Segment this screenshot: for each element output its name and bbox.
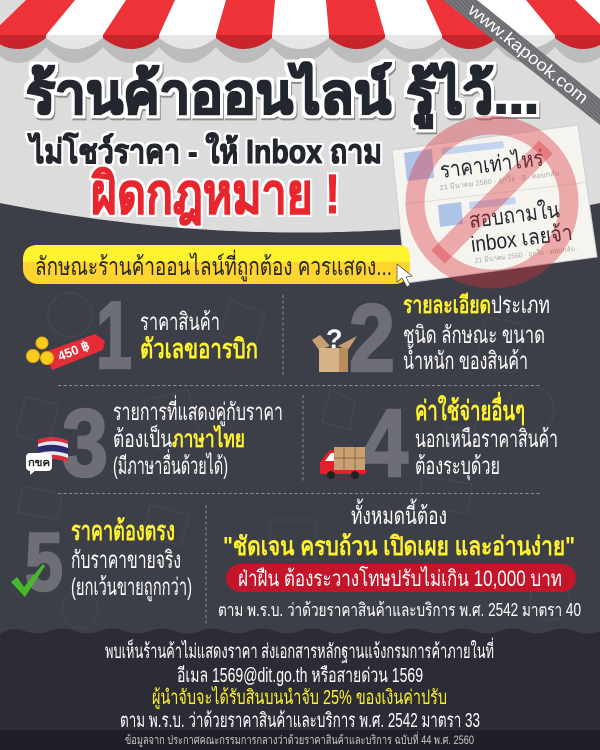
text [113, 395, 283, 480]
illustration: crossed-out inbox comments [392, 125, 597, 283]
item 1: price in Arabic numerals [26, 282, 258, 389]
yellow banner [23, 245, 412, 287]
icon: coins and price tag [26, 334, 105, 370]
footer panel [0, 628, 600, 750]
text: กับราคาขายจริง [71, 547, 181, 574]
awning [0, 0, 600, 63]
paper text: how much: ราคาเท่าไหร่ [439, 145, 545, 183]
icon: cursor [397, 264, 412, 287]
icon: box with question mark: ? [326, 324, 342, 354]
ribbon: website [443, 0, 600, 125]
icon: Thai flag and speech bubble: กขค [28, 458, 50, 469]
icon: delivery truck [320, 447, 366, 479]
text: รายการที่แสดงคู่กับราคา [113, 395, 283, 427]
text: ตัวเลขอารบิก [140, 334, 258, 364]
text [71, 516, 192, 602]
text: ค่าใช้จ่ายอื่นๆ [415, 391, 525, 426]
illustration: crossed-out inbox comments: 21 มีนาคม 2560 · ถูกใจ · 3 · ตอบกลับ · [439, 168, 564, 192]
prohibition sign [415, 125, 569, 279]
item 2: product details [312, 285, 550, 392]
text [403, 292, 550, 375]
source bar: ข้อมูลจาก ประกาศคณะกรรมการกลางว่าด้วยราคาสินค้าและบริการ ฉบับที่ 44 พ.ศ. 2560 [125, 731, 474, 748]
text: (ยกเว้นขายถูกกว่า) [71, 574, 192, 602]
contact: อีเมล 1569@dit.go.th หรือสายด่วน 1569 [177, 665, 423, 687]
title line 3: ผิดกฎหมาย ! [91, 162, 340, 225]
icon: box with question mark [312, 324, 357, 372]
yellow banner: ลักษณะร้านค้าออนไลน์ที่ถูกต้อง ควรแสดง... [35, 249, 392, 282]
text: ราคาสินค้า [140, 309, 220, 336]
paper card [392, 125, 597, 283]
illustration: crossed-out inbox comments: 21 มีนาคม 2560 · ถูกใจ · ตอบกลับ · [474, 243, 579, 265]
item 5: price matches selling price [11, 515, 192, 608]
numeral 2: 2 [349, 285, 395, 392]
title [26, 61, 539, 225]
title line 2: ไม่โชว์ราคา - ให้ Inbox ถาม [27, 132, 382, 170]
item 3: Thai language [26, 390, 283, 497]
text: ต้องระบุด้วย [415, 453, 500, 481]
illustration: crossed-out inbox comments: inbox เลยจ้า [470, 220, 574, 257]
reward: ผู้นำจับจะได้รับสินบนนำจับ 25% ของเงินค่าปรับ [152, 686, 447, 710]
text: รายละเอียดประเภท [403, 292, 550, 319]
icon: Thai flag and speech bubble [26, 437, 68, 475]
text [415, 391, 558, 481]
numeral 5: 5 [25, 515, 63, 608]
conclusion panel [218, 498, 581, 620]
text [140, 309, 258, 364]
item 4: other costs [320, 390, 558, 497]
paper text: ask in inbox: สอบถามใน [468, 197, 561, 233]
ribbon: website: www.kapook.com [464, 0, 592, 108]
heading: ทั้งหมดนี้ต้อง [351, 498, 447, 530]
text: น้ำหนัก ของสินค้า [403, 343, 528, 375]
text: (มีภาษาอื่นด้วยได้) [113, 449, 228, 480]
icon: coins and price tag: 450 ฿ [56, 338, 92, 364]
text: ราคาต้องตรง [71, 516, 175, 546]
numeral 3: 3 [62, 390, 108, 497]
title line 1: ร้านค้าออนไลน์ รู้ไว้... [26, 61, 539, 129]
icon: check mark [11, 564, 45, 597]
source bar [0, 730, 600, 750]
numeral 1: 1 [96, 282, 132, 389]
text: ต้องเป็นภาษาไทย [113, 424, 245, 453]
numeral 4: 4 [362, 390, 408, 497]
